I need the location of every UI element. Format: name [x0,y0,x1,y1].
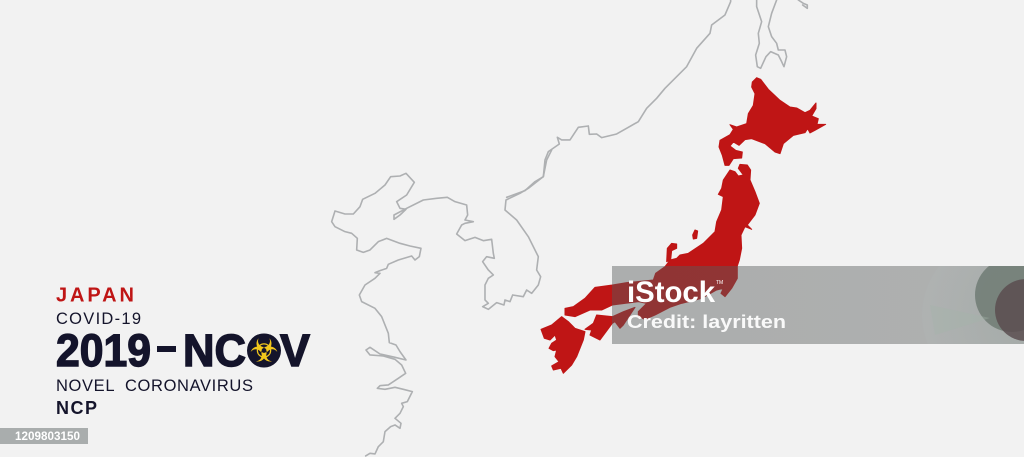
map: Japan in red [541,78,826,373]
COVID-19 label: COVID-19 [56,310,141,328]
headline 2019-NCOV: NC [183,325,246,376]
trademark: TM [716,280,723,286]
watermark translucent band [612,266,1024,344]
headline 2019-NCOV: V [280,325,310,376]
image id tag: 1209803150 [15,431,80,443]
Honshu [565,164,759,319]
watermark panel [612,266,1024,344]
coastline: northern fragment [798,0,807,8]
Noto peninsula [667,243,677,262]
icon: biohazard [247,334,281,368]
coastline: Sakhalin [756,0,787,68]
coastline: China and Korea [332,150,552,456]
image id tag [0,428,88,444]
iStock logo text: iStock [627,276,715,309]
Hokkaido [719,78,826,165]
coastline: Russia [507,0,731,197]
Shikoku [585,307,635,340]
title block [56,284,310,418]
Sado island [693,230,698,239]
Kyushu [541,317,585,373]
credit text: Credit: layritten [627,312,786,332]
country label: JAPAN [56,284,134,306]
headline 2019-NCOV [56,325,310,376]
subtitle: NOVEL CORONAVIRUS [56,377,253,395]
NCP label: NCP [56,398,97,418]
headline 2019-NCOV: O [247,325,281,376]
headline 2019-NCOV: 2019 [56,325,151,376]
map: neighbouring coastlines outline [332,0,807,456]
watermark circles [975,266,1024,341]
